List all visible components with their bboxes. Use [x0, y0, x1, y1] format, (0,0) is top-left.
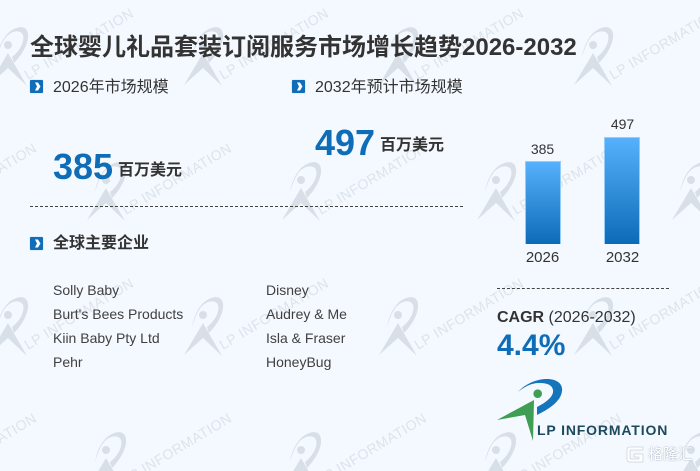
unit: million USD: 百万美元 [118, 162, 182, 179]
year label 2026: 2026 [526, 249, 559, 266]
year label 2032: 2032 [606, 249, 639, 266]
company list column 2: HoneyBug [266, 354, 331, 370]
heading: 2032 forecast market size: 2032年预计市场规模 [315, 79, 463, 96]
heading: key companies: 全球主要企业 [53, 235, 149, 252]
CAGR label: CAGR (2026-2032) [497, 309, 636, 326]
company list column 1 [53, 282, 183, 370]
company list column 2: Isla & Fraser [266, 330, 345, 346]
company list column 1: Solly Baby [53, 282, 119, 298]
CAGR value: 4.4% [497, 329, 565, 362]
bar chart [525, 116, 640, 266]
value label 385: 385 [531, 141, 554, 157]
panel: key companies [30, 234, 347, 370]
bar 2026 [524, 161, 560, 244]
title: 全球婴儿礼品套装订阅服务市场增长趋势2026-2032 [30, 34, 577, 61]
company list column 2: Audrey & Me [266, 306, 347, 322]
company list column 1: Kiin Baby Pty Ltd [53, 330, 160, 346]
icon: companies bullet [30, 237, 43, 250]
watermark text: 格隆汇 [648, 446, 693, 463]
panel: 2032 market size [292, 78, 463, 163]
watermark: Gelonghui [626, 446, 693, 463]
icon: 2032 bullet [292, 80, 305, 93]
company list column 2 [266, 282, 347, 370]
value label 497: 497 [611, 116, 634, 132]
CAGR block [497, 309, 636, 362]
value: 497: 497 [315, 122, 375, 163]
logo: LP Information: LP INFORMATION [537, 422, 668, 438]
icon: 2026 bullet [30, 80, 43, 93]
unit: million USD: 百万美元 [380, 137, 444, 154]
bar 2032 [604, 136, 640, 244]
logo: LP Information [497, 379, 668, 441]
company list column 2: Disney [266, 282, 309, 298]
company list column 1: Burt's Bees Products [53, 306, 183, 322]
company list column 1: Pehr [53, 354, 83, 370]
value: 385: 385 [53, 146, 113, 187]
panel: 2026 market size [30, 78, 182, 187]
heading: 2026 market size: 2026年市场规模 [53, 79, 169, 96]
